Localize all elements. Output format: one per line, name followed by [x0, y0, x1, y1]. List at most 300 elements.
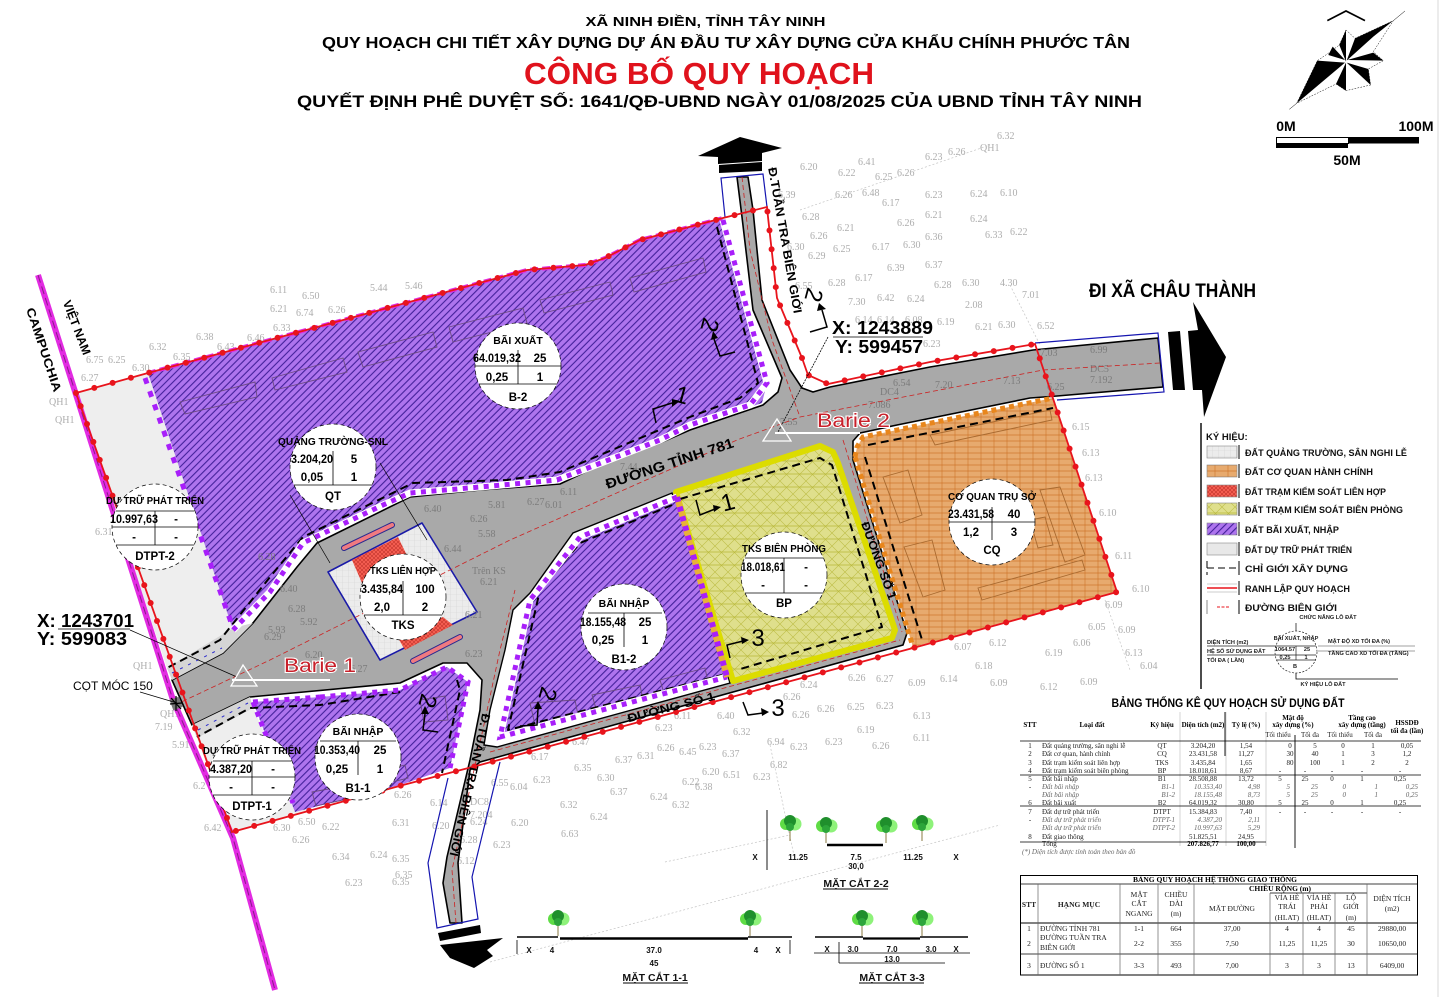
- title block: [297, 14, 1142, 111]
- table: transport system: PHẢI: [1310, 901, 1328, 911]
- table: land use statistics: Tỷ lệ (%): [1232, 721, 1261, 729]
- survey spot elevations: 6.2: [193, 781, 206, 792]
- table: transport system: 3: [1027, 961, 1031, 970]
- survey spot elevations: DC8: [470, 797, 489, 808]
- survey spot elevations: 6.42: [877, 293, 894, 304]
- elevations on road: 5.92: [300, 617, 318, 628]
- survey spot elevations: 6.24: [800, 680, 818, 691]
- reserve strips beside road: [167, 623, 253, 738]
- label: road no.1 east: ĐƯỜNG SỐ 1: [858, 520, 900, 602]
- rows: -: [1331, 808, 1334, 816]
- survey spot elevations: 6.30: [998, 320, 1016, 331]
- table: transport system: 493: [1170, 961, 1182, 970]
- survey spot elevations: 6.10: [1000, 188, 1018, 199]
- rows: Đất trạm kiểm soát liên hợp: [1042, 759, 1121, 767]
- rows: 15.384,83: [1189, 808, 1218, 816]
- rows: 1: [1341, 750, 1345, 758]
- plot label: TKS: 2: [422, 602, 428, 614]
- rows: 1: [1028, 742, 1032, 750]
- marker: section 2 in B-2: 2: [694, 315, 724, 335]
- survey spot elevations: 6.20: [432, 821, 450, 832]
- rows: 5: [1313, 742, 1317, 750]
- rows: 13,72: [1238, 775, 1254, 783]
- cross-section 1-1: X: [775, 946, 781, 955]
- survey spot elevations: 6.09: [1118, 625, 1136, 636]
- survey spot elevations: 6.35: [392, 877, 410, 888]
- survey spot elevations: 6.32: [672, 800, 690, 811]
- rows: 10.353,40: [1194, 783, 1222, 791]
- cross-section 3-3: X: [824, 945, 830, 954]
- table: transport system: 664: [1170, 924, 1182, 933]
- legend: plot label key diagram: TẦNG CAO XD TỐI ĐA (TẦNG): [1328, 650, 1409, 657]
- rows: 207.826,77: [1187, 840, 1219, 848]
- rows: 4: [1028, 767, 1032, 775]
- survey spot elevations: 7.19: [155, 722, 172, 733]
- survey spot elevations: 6.22: [838, 168, 856, 179]
- survey spot elevations: 6.24: [590, 812, 608, 823]
- legend: plot label key diagram: 1064.57: [1275, 647, 1295, 653]
- rows: 5: [1028, 775, 1032, 783]
- elevations on road: 6.21: [480, 577, 498, 588]
- scale bar: [1276, 118, 1434, 168]
- rows: 3.435,84: [1191, 759, 1216, 767]
- rows: Đất dự trữ phát triển: [1041, 816, 1101, 824]
- survey spot elevations: 6.27: [172, 567, 190, 578]
- survey spot elevations: 6.21: [270, 304, 288, 315]
- Barie 1 gate: [231, 656, 356, 686]
- survey spot elevations: 6.37: [615, 755, 632, 766]
- survey spot elevations: DC1: [97, 403, 116, 414]
- cross-section 3-3: 3.0: [925, 945, 937, 954]
- elevations on road: 5.93: [268, 625, 286, 636]
- rows: Đất giao thông: [1042, 833, 1084, 841]
- plot label: B1-2: 1: [642, 635, 649, 647]
- table: transport system: NGANG: [1125, 909, 1153, 918]
- table: land use statistics: Tối đa: [1364, 731, 1383, 739]
- label: provincial road 781: ĐƯỜNG TỈNH 781: [603, 434, 736, 492]
- rows: 23.431,58: [1189, 750, 1218, 758]
- rows: 3.204,20: [1191, 742, 1216, 750]
- survey spot elevations: 5.44: [370, 283, 388, 294]
- table: transport system: 4: [1317, 924, 1321, 933]
- rows: 0,25: [1406, 791, 1418, 799]
- rows: 1: [1360, 799, 1364, 807]
- table: transport system: CẮT: [1132, 898, 1147, 908]
- survey spot elevations: 6.17: [531, 752, 548, 763]
- rows: 8,73: [1248, 791, 1260, 799]
- elevations on road: 6.27: [350, 664, 368, 675]
- table: transport system: 11,25: [1311, 939, 1328, 948]
- legend row: agency: ĐẤT CƠ QUAN HÀNH CHÍNH: [1245, 467, 1373, 478]
- survey spot elevations: 6.23: [493, 840, 510, 851]
- plot label: CQ: 23.431,58: [948, 509, 995, 521]
- table: transport system: 2: [1027, 939, 1031, 948]
- survey spot elevations: 6.32: [149, 342, 166, 353]
- rows: 1: [1371, 742, 1375, 750]
- cross-section 3-3: 13.0: [884, 955, 900, 964]
- survey spot elevations: 6.75: [86, 355, 104, 366]
- survey spot elevations: 6.15: [1072, 422, 1090, 433]
- plot B-2: export yard: [148, 218, 767, 630]
- dotted plot edges: [145, 220, 1053, 803]
- survey spot elevations: 6.43: [217, 342, 234, 353]
- survey spot elevations: 6.50: [302, 291, 320, 302]
- boundary marker: column 150: CỌT MÓC 150: [73, 678, 153, 693]
- table: transport system: DIỆN TÍCH: [1373, 893, 1411, 903]
- tree: [548, 910, 570, 936]
- survey spot elevations: 6.38: [196, 332, 214, 343]
- survey spot elevations: 6.24: [370, 850, 388, 861]
- survey spot elevations: 6.19: [1045, 648, 1062, 659]
- legend: plot label key diagram: [1207, 613, 1415, 688]
- plot CQ: administrative agency: [855, 398, 1117, 647]
- survey spot elevations: 6.28: [934, 280, 952, 291]
- rows: TKS: [1155, 759, 1169, 767]
- table: transport system: STT: [1022, 900, 1036, 909]
- elevations on road: 6.11: [560, 487, 577, 498]
- rows: 2: [1405, 759, 1409, 767]
- plot label: CQ: 40: [1008, 509, 1020, 521]
- rows: B2: [1158, 799, 1167, 807]
- elevations on road: 6.40: [424, 504, 442, 515]
- legend row: building line: [1207, 561, 1348, 575]
- survey spot elevations: 6.17: [882, 198, 900, 209]
- survey spot elevations: 6.26: [835, 190, 852, 201]
- plot label: QT: QUẢNG TRƯỜNG-SNL: [278, 435, 389, 448]
- label: road no.1 south: ĐƯỜNG SỐ 1: [626, 689, 717, 725]
- cross-section 1-1: X: [526, 946, 532, 955]
- survey spot elevations: 6.38: [695, 782, 712, 793]
- cross-section 1-1: 4: [754, 946, 759, 955]
- plot label: DTPT-2: -: [174, 532, 178, 544]
- rows: 64.019,32: [1189, 799, 1218, 807]
- survey spot elevations: 6.12: [1040, 682, 1058, 693]
- survey spot elevations: 6.26: [848, 673, 866, 684]
- table: transport system: 13: [1347, 961, 1355, 970]
- survey spot elevations: 6.26: [120, 444, 138, 455]
- leader lines: [290, 463, 427, 563]
- legend row: border checkpoint: [1207, 502, 1403, 516]
- survey spot elevations: 6.30: [597, 773, 614, 784]
- plot label: B1-1: BÃI NHẬP: [333, 725, 383, 738]
- cross-section 2-2: X: [752, 853, 758, 862]
- survey spot elevations: 6.24: [470, 817, 488, 828]
- rows: 28.508,88: [1189, 775, 1218, 783]
- table: land use statistics: Loại đất: [1079, 721, 1105, 729]
- callout: coordinates west: X: 1243701: [37, 611, 134, 631]
- rows: QT: [1157, 742, 1167, 750]
- table: transport system: (HLAT): [1307, 913, 1332, 922]
- rows: 5: [1286, 783, 1290, 791]
- survey spot elevations: 6.11: [913, 733, 930, 744]
- survey spot elevations: 6.32: [733, 727, 750, 738]
- tree: [780, 815, 802, 841]
- marker: section 2 in B1-2: 2: [532, 684, 562, 704]
- plot label: BP: -: [804, 562, 808, 574]
- survey spot elevations: 6.19: [937, 317, 954, 328]
- survey spot elevations: 6.24: [650, 792, 668, 803]
- rows: (*) Diện tích được tính toán theo bản đồ: [1022, 848, 1136, 856]
- panel: legend: [1201, 423, 1415, 689]
- plot label: DTPT-1: DỰ TRỮ PHÁT TRIỂN: [203, 744, 301, 757]
- rows: 0,05: [1401, 742, 1414, 750]
- table: transport system: VỈA HÈ: [1275, 892, 1300, 902]
- survey spot elevations: 6.29: [808, 251, 826, 262]
- rows: 2: [1028, 750, 1032, 758]
- plot label: DTPT-2: -: [132, 532, 136, 544]
- elevations on road: 6.25: [1047, 382, 1064, 393]
- rows: -: [1304, 767, 1307, 775]
- rows: 2: [1371, 759, 1375, 767]
- survey spot elevations: 6.25: [833, 244, 850, 255]
- rows: B1-1: [1161, 783, 1175, 791]
- plot label: TKS: 2,0: [374, 602, 390, 614]
- rows: 7,40: [1240, 808, 1253, 816]
- survey spot elevations: 6.25: [108, 355, 126, 366]
- table: transport system: TRÁI: [1278, 901, 1296, 911]
- elevations on road: 6.01: [545, 500, 562, 511]
- plot label: QT: QT: [325, 491, 341, 503]
- elevations on road: 7.086: [868, 400, 890, 411]
- cross-section 2-2: 30,0: [848, 862, 864, 871]
- cross-section 1-1: 4: [550, 946, 555, 955]
- table: transport system: ĐƯỜNG TUẦN TRA: [1040, 932, 1107, 942]
- elevations on road: 6.99: [1090, 345, 1108, 356]
- survey spot elevations: 6.33: [985, 230, 1002, 241]
- legend row: agency: [1207, 464, 1373, 478]
- legend row: plaza: [1207, 445, 1407, 459]
- survey spot elevations: 6.27: [186, 590, 204, 601]
- marker: section 3 in BP: 3: [751, 625, 765, 652]
- cross-section 2-2: 11.25: [788, 853, 808, 862]
- survey spot elevations: 6.74: [296, 308, 314, 319]
- marker: section 1 in BP: [696, 488, 738, 518]
- plot label: CQ: [948, 479, 1036, 565]
- road network: [172, 177, 1163, 923]
- marker: section 1 on road: [653, 381, 692, 423]
- survey spot elevations: 2.08: [965, 300, 982, 311]
- elevations on road: 6.54: [893, 378, 910, 389]
- survey spot elevations: 6.498: [95, 413, 118, 424]
- elevations on road: 6.40: [280, 584, 298, 595]
- table: transport system: BẢNG QUY HOẠCH HỆ THỐNG GIAO THÔNG: [1133, 874, 1297, 884]
- table: transport system: CHIỀU RỘNG (m): [1249, 883, 1312, 893]
- legend row: yard: ĐẤT BÃI XUẤT, NHẬP: [1245, 524, 1340, 536]
- rows: CQ: [1157, 750, 1167, 758]
- elevations on road: 5.81: [488, 500, 506, 511]
- cross-section 1-1: 37.0: [646, 946, 662, 955]
- plot B1-1: import yard: [253, 667, 468, 812]
- elevations on road: 7.192: [1090, 375, 1112, 386]
- survey spot elevations: 6.31: [95, 527, 112, 538]
- table: transport system: ĐƯỜNG SỐ 1: [1040, 960, 1085, 970]
- survey spot elevations: 6.23: [699, 742, 716, 753]
- title: commune: XÃ NINH ĐIỀN, TỈNH TÂY NINH: [586, 14, 826, 29]
- blue road limit outlines: [428, 174, 1164, 928]
- survey spot elevations: 6.12: [989, 638, 1006, 649]
- survey spot elevations: 6.10: [1099, 508, 1116, 519]
- rows: 8: [1028, 833, 1032, 841]
- elevations on road: 6.28: [288, 604, 306, 615]
- rows: 1: [1374, 791, 1378, 799]
- survey spot elevations: 6.25: [173, 610, 190, 621]
- table: land use statistics: BẢNG THỐNG KÊ QUY HOẠCH SỬ DỤNG ĐẤT: [1112, 696, 1344, 710]
- rows: 5: [1278, 775, 1282, 783]
- border line Vietnam-Cambodia: [38, 275, 275, 990]
- section markers: [412, 285, 828, 732]
- plot label: DTPT-2: [106, 484, 204, 570]
- cross-section 2-2: MẶT CẮT 2-2: [823, 877, 889, 890]
- survey spot elevations: 6.22: [322, 822, 340, 833]
- elevations on road: 6.27: [527, 497, 544, 508]
- survey spot elevations: 6.21: [837, 223, 854, 234]
- survey spot elevations: 6.51: [723, 770, 740, 781]
- survey spot elevations: 6.04: [510, 782, 528, 793]
- survey spot elevations: 6.50: [298, 817, 316, 828]
- rows: 0: [1330, 799, 1334, 807]
- title: announcement: CÔNG BỐ QUY HOẠCH: [524, 55, 874, 91]
- marker: section 2 in B1-1: [412, 691, 442, 732]
- table: transport system: MẶT: [1131, 890, 1148, 899]
- rows: 1,2: [1403, 750, 1412, 758]
- table: transport system: 30: [1347, 939, 1355, 948]
- rows: 4.387,20: [1198, 816, 1222, 824]
- survey spot elevations: 6.23: [876, 701, 894, 712]
- rows: 4,98: [1248, 783, 1260, 791]
- title: decision: QUYẾT ĐỊNH PHÊ DUYỆT SỐ: 1641/QĐ-UBND NGÀY 01/08/2025 CỦA UBND TỈNH TÂY NINH: [297, 91, 1142, 111]
- rows: Đất dự trữ phát triển: [1041, 824, 1101, 832]
- rows: Đất bãi nhập: [1041, 791, 1079, 799]
- survey spot elevations: 6.41: [858, 157, 876, 168]
- label: to Chau Thanh: ĐI XÃ CHÂU THÀNH: [1089, 280, 1256, 302]
- tree: [852, 910, 874, 936]
- survey spot elevations: 6.26: [105, 432, 122, 443]
- survey spot elevations: 4.30: [1000, 278, 1018, 289]
- legend row: yard: [1207, 522, 1340, 536]
- survey spot elevations: 6.35: [395, 870, 412, 881]
- legend row: border checkpoint: ĐẤT TRẠM KIỂM SOÁT BIÊN PHÒNG: [1245, 504, 1403, 516]
- label: Cambodia: CAMPUCHIA: [23, 306, 65, 394]
- marker: section 1 on road: 1: [672, 381, 692, 411]
- table: land use statistics: Diện tích (m2): [1182, 721, 1225, 729]
- survey spot elevations: 6.13: [1082, 448, 1100, 459]
- plot label: QT: [278, 424, 389, 510]
- legend row: reserve: ĐẤT DỰ TRỮ PHÁT TRIỂN: [1245, 544, 1352, 556]
- plot label: BP: [741, 532, 827, 618]
- rows: 100,00: [1236, 840, 1256, 848]
- legend: plot label key diagram: B: [1293, 664, 1297, 670]
- rows: DTPT-2: [1152, 824, 1175, 832]
- rows: 6: [1028, 799, 1032, 807]
- rows: 10.997,63: [1194, 824, 1222, 832]
- plot DTPT-1: reserve land: [192, 707, 308, 832]
- callout: coordinates east: X: 1243889: [832, 318, 933, 338]
- cross-section 3-3: [814, 910, 970, 984]
- rows: -: [1361, 767, 1364, 775]
- table: land use statistics: HSSDĐ: [1395, 719, 1419, 727]
- rows: 100: [1310, 759, 1321, 767]
- white verge around B1-2: [484, 493, 730, 747]
- rows: 0: [1330, 775, 1334, 783]
- legend: plot label key diagram: 25: [1304, 647, 1310, 653]
- plot label: QT: 1: [351, 472, 358, 484]
- plot label: BP: BP: [776, 598, 792, 610]
- survey spot elevations: 6.26: [657, 743, 674, 754]
- survey spot elevations: 6.10: [1132, 584, 1150, 595]
- plot DTPT-2: reserve land: [76, 373, 233, 668]
- survey spot elevations: 6.30: [903, 240, 920, 251]
- legend: plot label key diagram: BÃI XUẤT, NHẬP: [1274, 635, 1319, 642]
- legend row: building line: CHỈ GIỚI XÂY DỰNG: [1245, 563, 1348, 575]
- plot label: B-2: BÃI XUẤT: [493, 334, 543, 347]
- plot label: DTPT-2: DTPT-2: [135, 551, 175, 563]
- marker: section 2 north: 2: [798, 285, 828, 305]
- legend: plot label key diagram: DIỆN TÍCH (m2): [1207, 638, 1248, 646]
- elevations on road: 5.58: [478, 529, 496, 540]
- rows: DTPT-1: [1152, 816, 1175, 824]
- rows: 0,25: [1406, 783, 1418, 791]
- rows: -: [1361, 808, 1364, 816]
- elevations on road: 7.55: [780, 417, 798, 428]
- survey spot elevations: 6.07: [954, 642, 972, 653]
- arrow: east: [1168, 302, 1226, 417]
- table: transport system: 1: [1027, 924, 1031, 933]
- cross-section 1-1: [517, 910, 792, 984]
- plot label: TKS: TKS LIÊN HỢP: [370, 564, 436, 577]
- legend: plot label key diagram: MẬT ĐỘ XD TỐI ĐA (%): [1328, 637, 1390, 645]
- plot B1-2: import yard: [500, 497, 727, 737]
- table: land use statistics: Mật độ: [1282, 714, 1304, 722]
- arrow: south: [438, 925, 503, 968]
- scale bar: 100M: [1398, 118, 1434, 134]
- survey spot elevations: 6.34: [332, 852, 350, 863]
- table: transport system: (m): [1346, 913, 1357, 922]
- tree: [876, 817, 898, 843]
- rows: -: [1029, 816, 1032, 824]
- marker: section 3 south: [743, 695, 785, 722]
- plot label: B1-1: B1-1: [346, 783, 371, 795]
- survey spot elevations: 6.30: [962, 278, 980, 289]
- plot label: TKS: 3.435,84: [361, 584, 404, 596]
- survey spot elevations: 6.35: [574, 763, 592, 774]
- table: transport system: 2-2: [1134, 939, 1144, 948]
- road labels: [23, 166, 1256, 858]
- cross-section 1-1: MẶT CẮT 1-1: [622, 971, 688, 984]
- table: transport system: 6409,00: [1380, 961, 1404, 970]
- marker: section 3 south: 3: [771, 695, 785, 722]
- survey spot elevations: 6.26: [328, 305, 346, 316]
- table: land use statistics: Tối thiểu: [1327, 731, 1353, 739]
- elevations on road: DC4: [880, 387, 899, 398]
- legend row: border line: ĐƯỜNG BIÊN GIỚI: [1245, 602, 1337, 614]
- rows: Đất dự trữ phát triển: [1042, 808, 1100, 816]
- rows: 24,95: [1238, 833, 1254, 841]
- legend row: reserve: [1207, 542, 1352, 556]
- rows: 3: [1371, 750, 1375, 758]
- survey spot elevations: 6.18: [975, 661, 992, 672]
- plot label: B1-2: 18.155,48: [580, 617, 627, 629]
- elevations on road: 7.03: [1040, 348, 1058, 359]
- table: transport system: VỈA HÈ: [1307, 892, 1332, 902]
- rows: 8,67: [1240, 767, 1253, 775]
- survey spot elevations: 6.14: [877, 315, 894, 326]
- table: transport system: 7,50: [1225, 939, 1239, 948]
- plot label: TKS: [360, 554, 446, 640]
- survey spot elevations: 6.42: [204, 823, 222, 834]
- survey spot elevations: 6.55: [795, 281, 812, 292]
- table: land use statistics: xây dựng (tầng): [1338, 721, 1386, 729]
- rows: 1: [1374, 783, 1378, 791]
